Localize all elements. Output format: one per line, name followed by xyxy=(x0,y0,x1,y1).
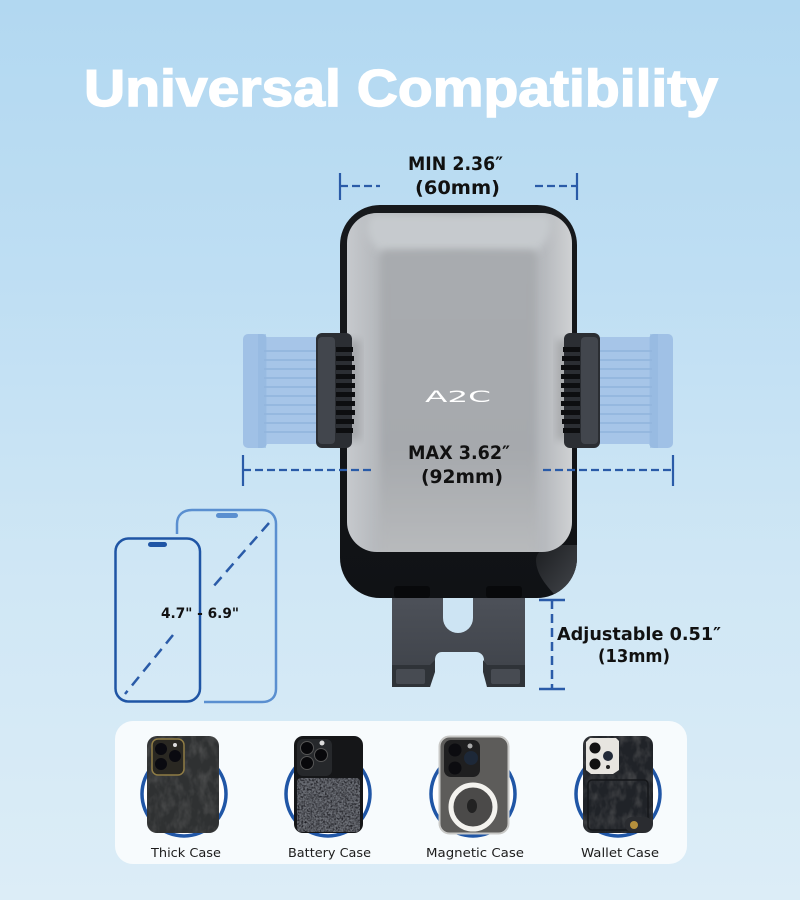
min width label: MIN 2.36″ xyxy=(408,153,503,175)
thick case: Thick Case xyxy=(150,845,221,860)
wallet case: Wallet Case xyxy=(581,845,659,860)
brand logo: A2C xyxy=(425,387,491,406)
magnetic case xyxy=(426,736,524,860)
title: Universal Compatibility xyxy=(84,60,718,118)
adjustable label xyxy=(557,624,721,667)
mount body xyxy=(340,205,577,600)
wallet case xyxy=(576,736,660,860)
battery case xyxy=(286,736,371,860)
bracket arm xyxy=(392,596,525,687)
adjustable label: (13mm) xyxy=(598,646,670,667)
min width label: (60mm) xyxy=(415,177,500,199)
adjustable label: Adjustable 0.51″ xyxy=(557,624,721,645)
right extended grip ghost xyxy=(596,334,673,448)
min width label xyxy=(408,153,503,199)
max width dimension arrow xyxy=(243,455,673,486)
min width dimension arrow xyxy=(340,173,577,200)
max width label: MAX 3.62″ xyxy=(408,442,510,464)
phone size diagram: small phone xyxy=(116,538,200,702)
left clamp xyxy=(316,333,360,448)
right clamp xyxy=(557,333,600,448)
battery case: Battery Case xyxy=(288,845,371,860)
max width label: (92mm) xyxy=(421,466,503,488)
thick case xyxy=(142,736,226,860)
max width label xyxy=(408,442,510,488)
adjustable height dimension xyxy=(539,600,565,689)
left extended grip ghost xyxy=(243,334,320,448)
magnetic case: Magnetic Case xyxy=(426,845,524,860)
panel: case types xyxy=(115,721,687,864)
screen size label: 4.7" - 6.9" xyxy=(161,606,239,622)
phone size diagram: large phone xyxy=(177,510,276,702)
